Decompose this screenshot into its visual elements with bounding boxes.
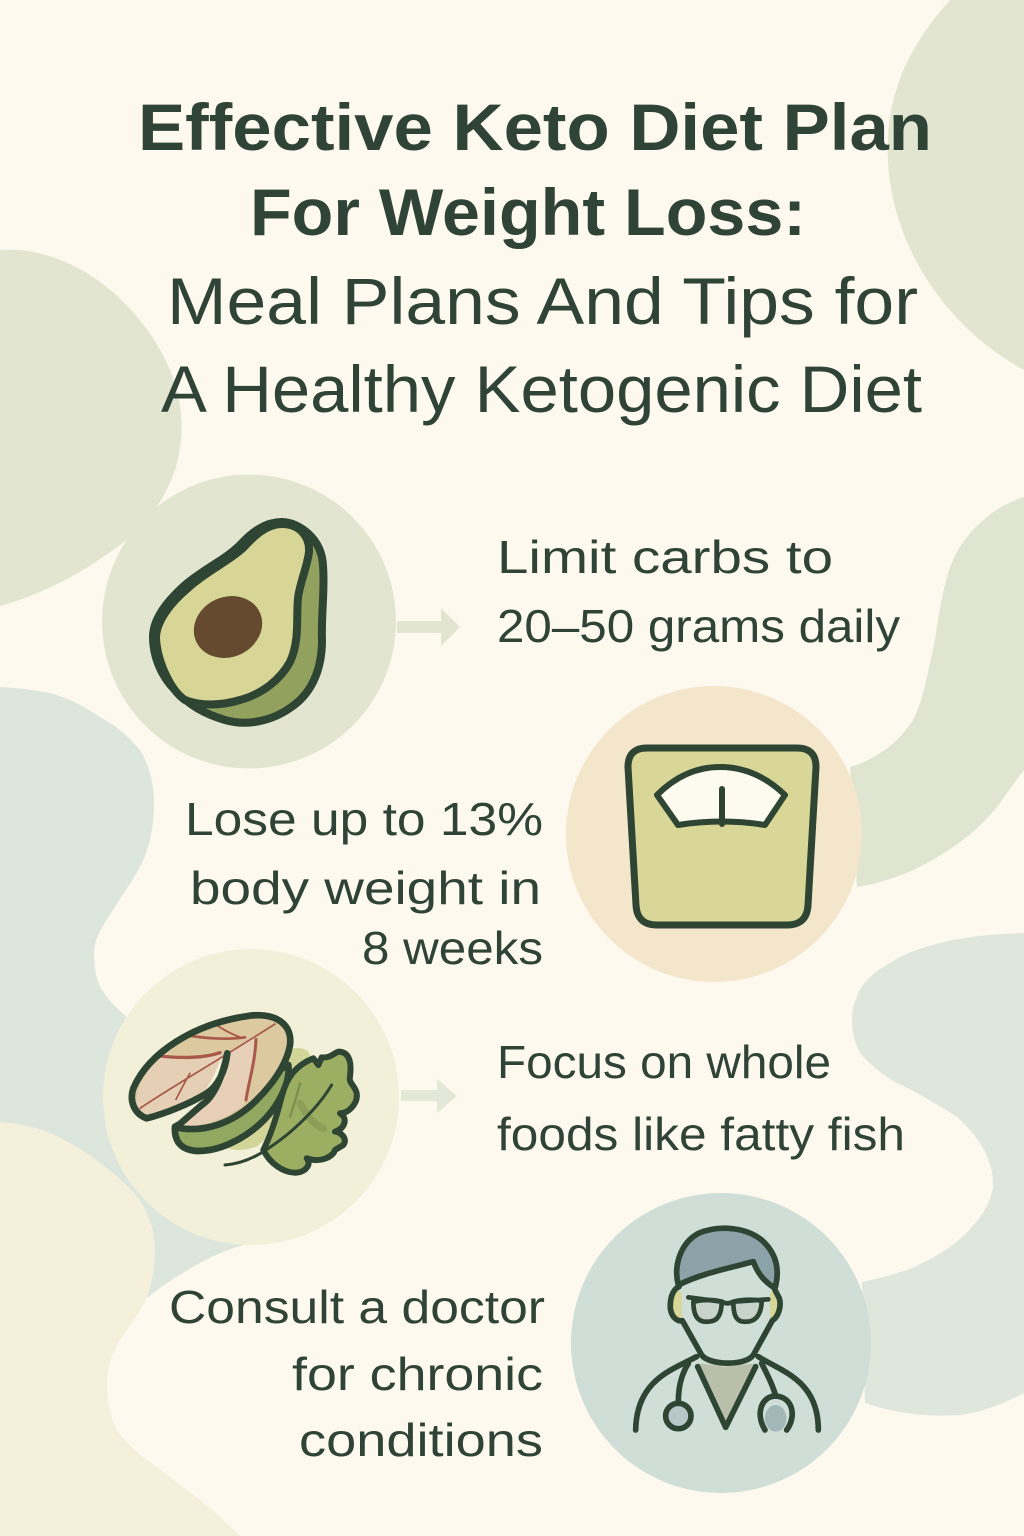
arrow: fish to whole foods text	[401, 1079, 457, 1113]
text: consult a doctor: for chronic	[292, 1348, 543, 1400]
text: whole foods: Focus on whole	[497, 1036, 831, 1088]
text: whole foods	[497, 1036, 905, 1160]
title: A Healthy Ketogenic Diet	[161, 352, 922, 426]
icon: doctor with stethoscope	[571, 1193, 871, 1493]
icon: weighing scale	[566, 686, 862, 982]
title: Effective Keto Diet Plan	[138, 90, 932, 164]
title: Meal Plans And Tips for	[167, 264, 918, 338]
text: consult a doctor: Consult a doctor	[169, 1281, 545, 1333]
text: limit carbs: 20–50 grams daily	[497, 600, 900, 652]
text: lose weight	[185, 793, 543, 974]
text: consult a doctor	[169, 1281, 545, 1466]
title: For Weight Loss:	[250, 175, 806, 249]
icon: fatty fish and herb	[103, 949, 399, 1245]
text: consult a doctor: conditions	[299, 1414, 543, 1466]
text: whole foods: foods like fatty fish	[497, 1108, 905, 1160]
arrow: avocado to carbs text	[397, 608, 460, 646]
text: lose weight: Lose up to 13%	[185, 793, 543, 845]
text: lose weight: body weight in	[190, 862, 541, 914]
title	[138, 90, 932, 426]
text: limit carbs: Limit carbs to	[497, 531, 833, 583]
text: lose weight: 8 weeks	[362, 922, 543, 974]
text: limit carbs	[497, 531, 900, 652]
icon: avocado	[102, 474, 396, 768]
